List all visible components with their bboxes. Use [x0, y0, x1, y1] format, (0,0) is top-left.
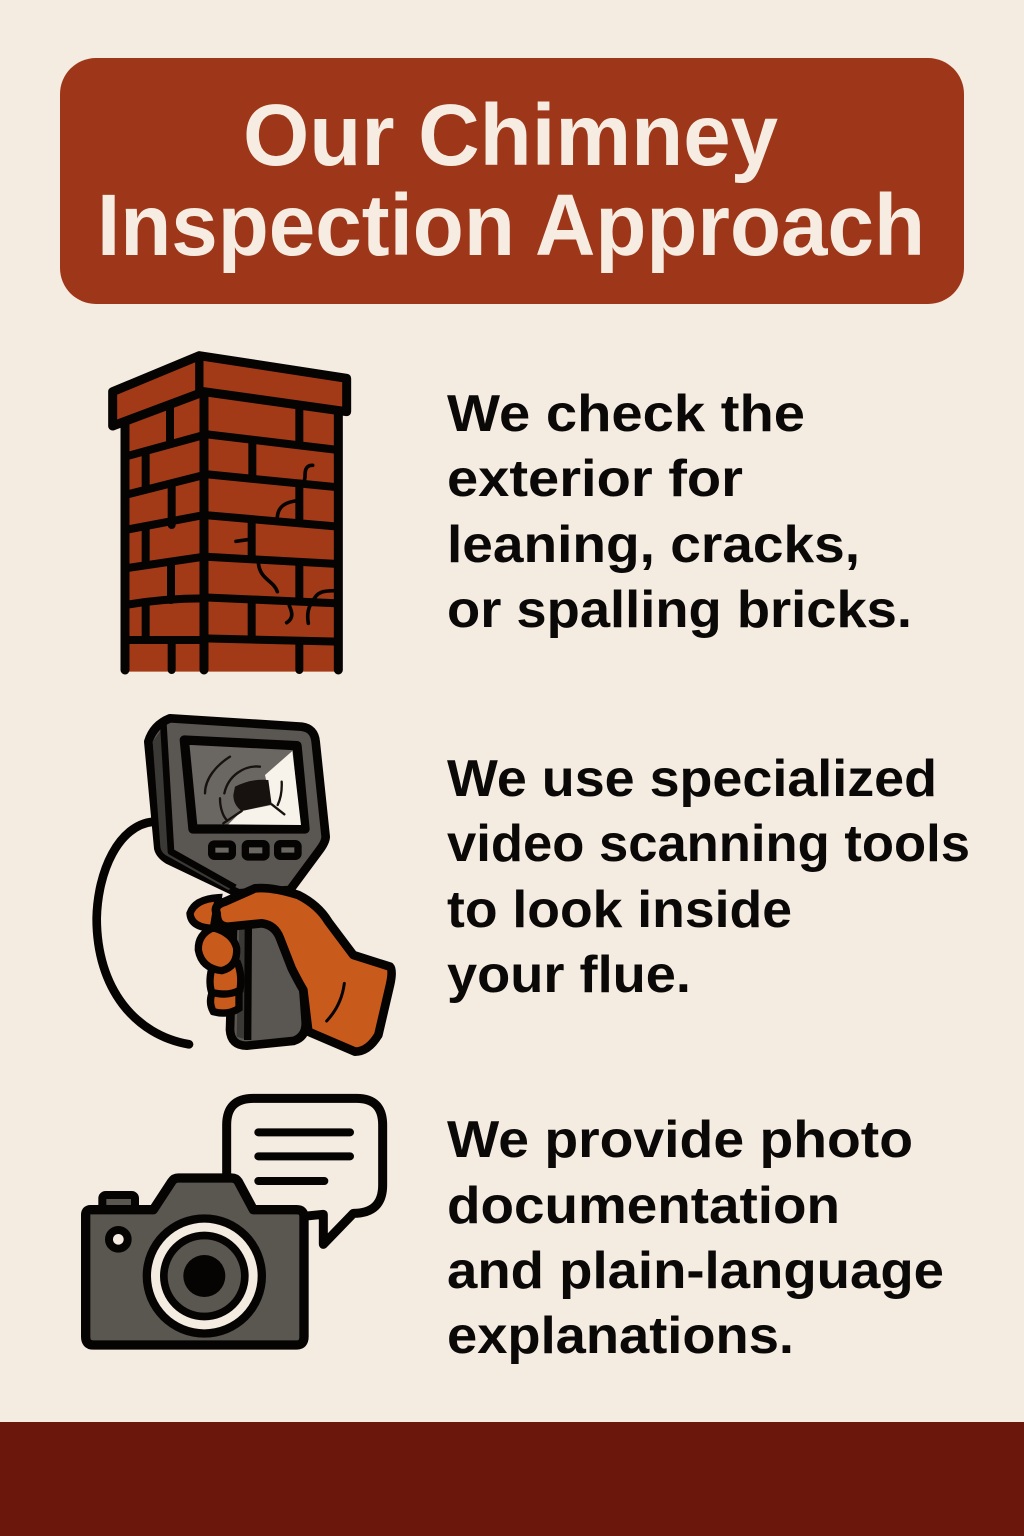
scanner grip	[230, 918, 306, 1046]
footer band	[0, 1422, 1024, 1536]
icon: camera with speech bubble	[86, 1098, 383, 1345]
bubble text lines	[258, 1132, 350, 1181]
text: video scanning: your flue.	[447, 946, 691, 1004]
text: photo documentation: explanations.	[447, 1307, 794, 1365]
camera lens	[143, 1214, 266, 1338]
heading: Our Chimney	[243, 87, 778, 184]
text: photo documentation	[447, 1111, 944, 1365]
scanner body	[148, 718, 326, 893]
title panel	[60, 58, 964, 304]
chimney brick body	[125, 390, 338, 672]
wrist crease	[327, 983, 344, 1021]
text: video scanning: We use specialized	[447, 750, 937, 808]
screen frame	[184, 740, 305, 829]
chimney cap	[113, 356, 347, 426]
icon: brick chimney	[113, 356, 347, 672]
scanner cable	[97, 822, 189, 1044]
lens pupil	[183, 1255, 225, 1297]
text: photo documentation: and plain-language	[447, 1242, 944, 1300]
text: exterior check: exterior for	[447, 450, 743, 508]
body side shadow	[153, 728, 233, 890]
screen	[184, 740, 305, 829]
title banner	[60, 58, 964, 304]
lens glass	[168, 1239, 241, 1313]
lens outer ring	[143, 1214, 266, 1338]
flue arcs	[205, 757, 284, 823]
hand fingers	[190, 898, 241, 1013]
text: exterior check: We check the	[447, 385, 805, 443]
cap corner line	[187, 356, 212, 392]
text: exterior check: or spalling bricks.	[447, 581, 912, 639]
text: exterior check	[447, 385, 912, 639]
text: video scanning: to look inside	[447, 881, 792, 939]
icon: video scanner in hand	[97, 718, 392, 1052]
text: photo documentation: documentation	[447, 1177, 840, 1235]
scanner buttons	[212, 844, 298, 857]
camera viewfinder bump	[102, 1195, 135, 1212]
hand palm and thumb	[216, 888, 392, 1052]
text: exterior check: leaning, cracks,	[447, 516, 860, 574]
camera body	[86, 1178, 304, 1345]
text: photo documentation: We provide photo	[447, 1111, 913, 1169]
flue opening	[233, 780, 272, 811]
body side divider	[163, 723, 235, 888]
grip shadow	[237, 928, 248, 1040]
heading	[97, 87, 925, 274]
mortar lines	[125, 393, 338, 670]
cracks	[236, 465, 335, 623]
grip divider	[237, 928, 259, 1040]
speech bubble	[227, 1098, 383, 1244]
screen bright area	[228, 751, 301, 825]
flash light	[109, 1230, 128, 1249]
text: video scanning	[447, 750, 970, 1004]
lens cream ring	[151, 1223, 258, 1329]
text: video scanning: video scanning tools	[447, 815, 970, 873]
lens inner ring	[160, 1232, 249, 1320]
heading: Inspection Approach	[97, 177, 925, 274]
